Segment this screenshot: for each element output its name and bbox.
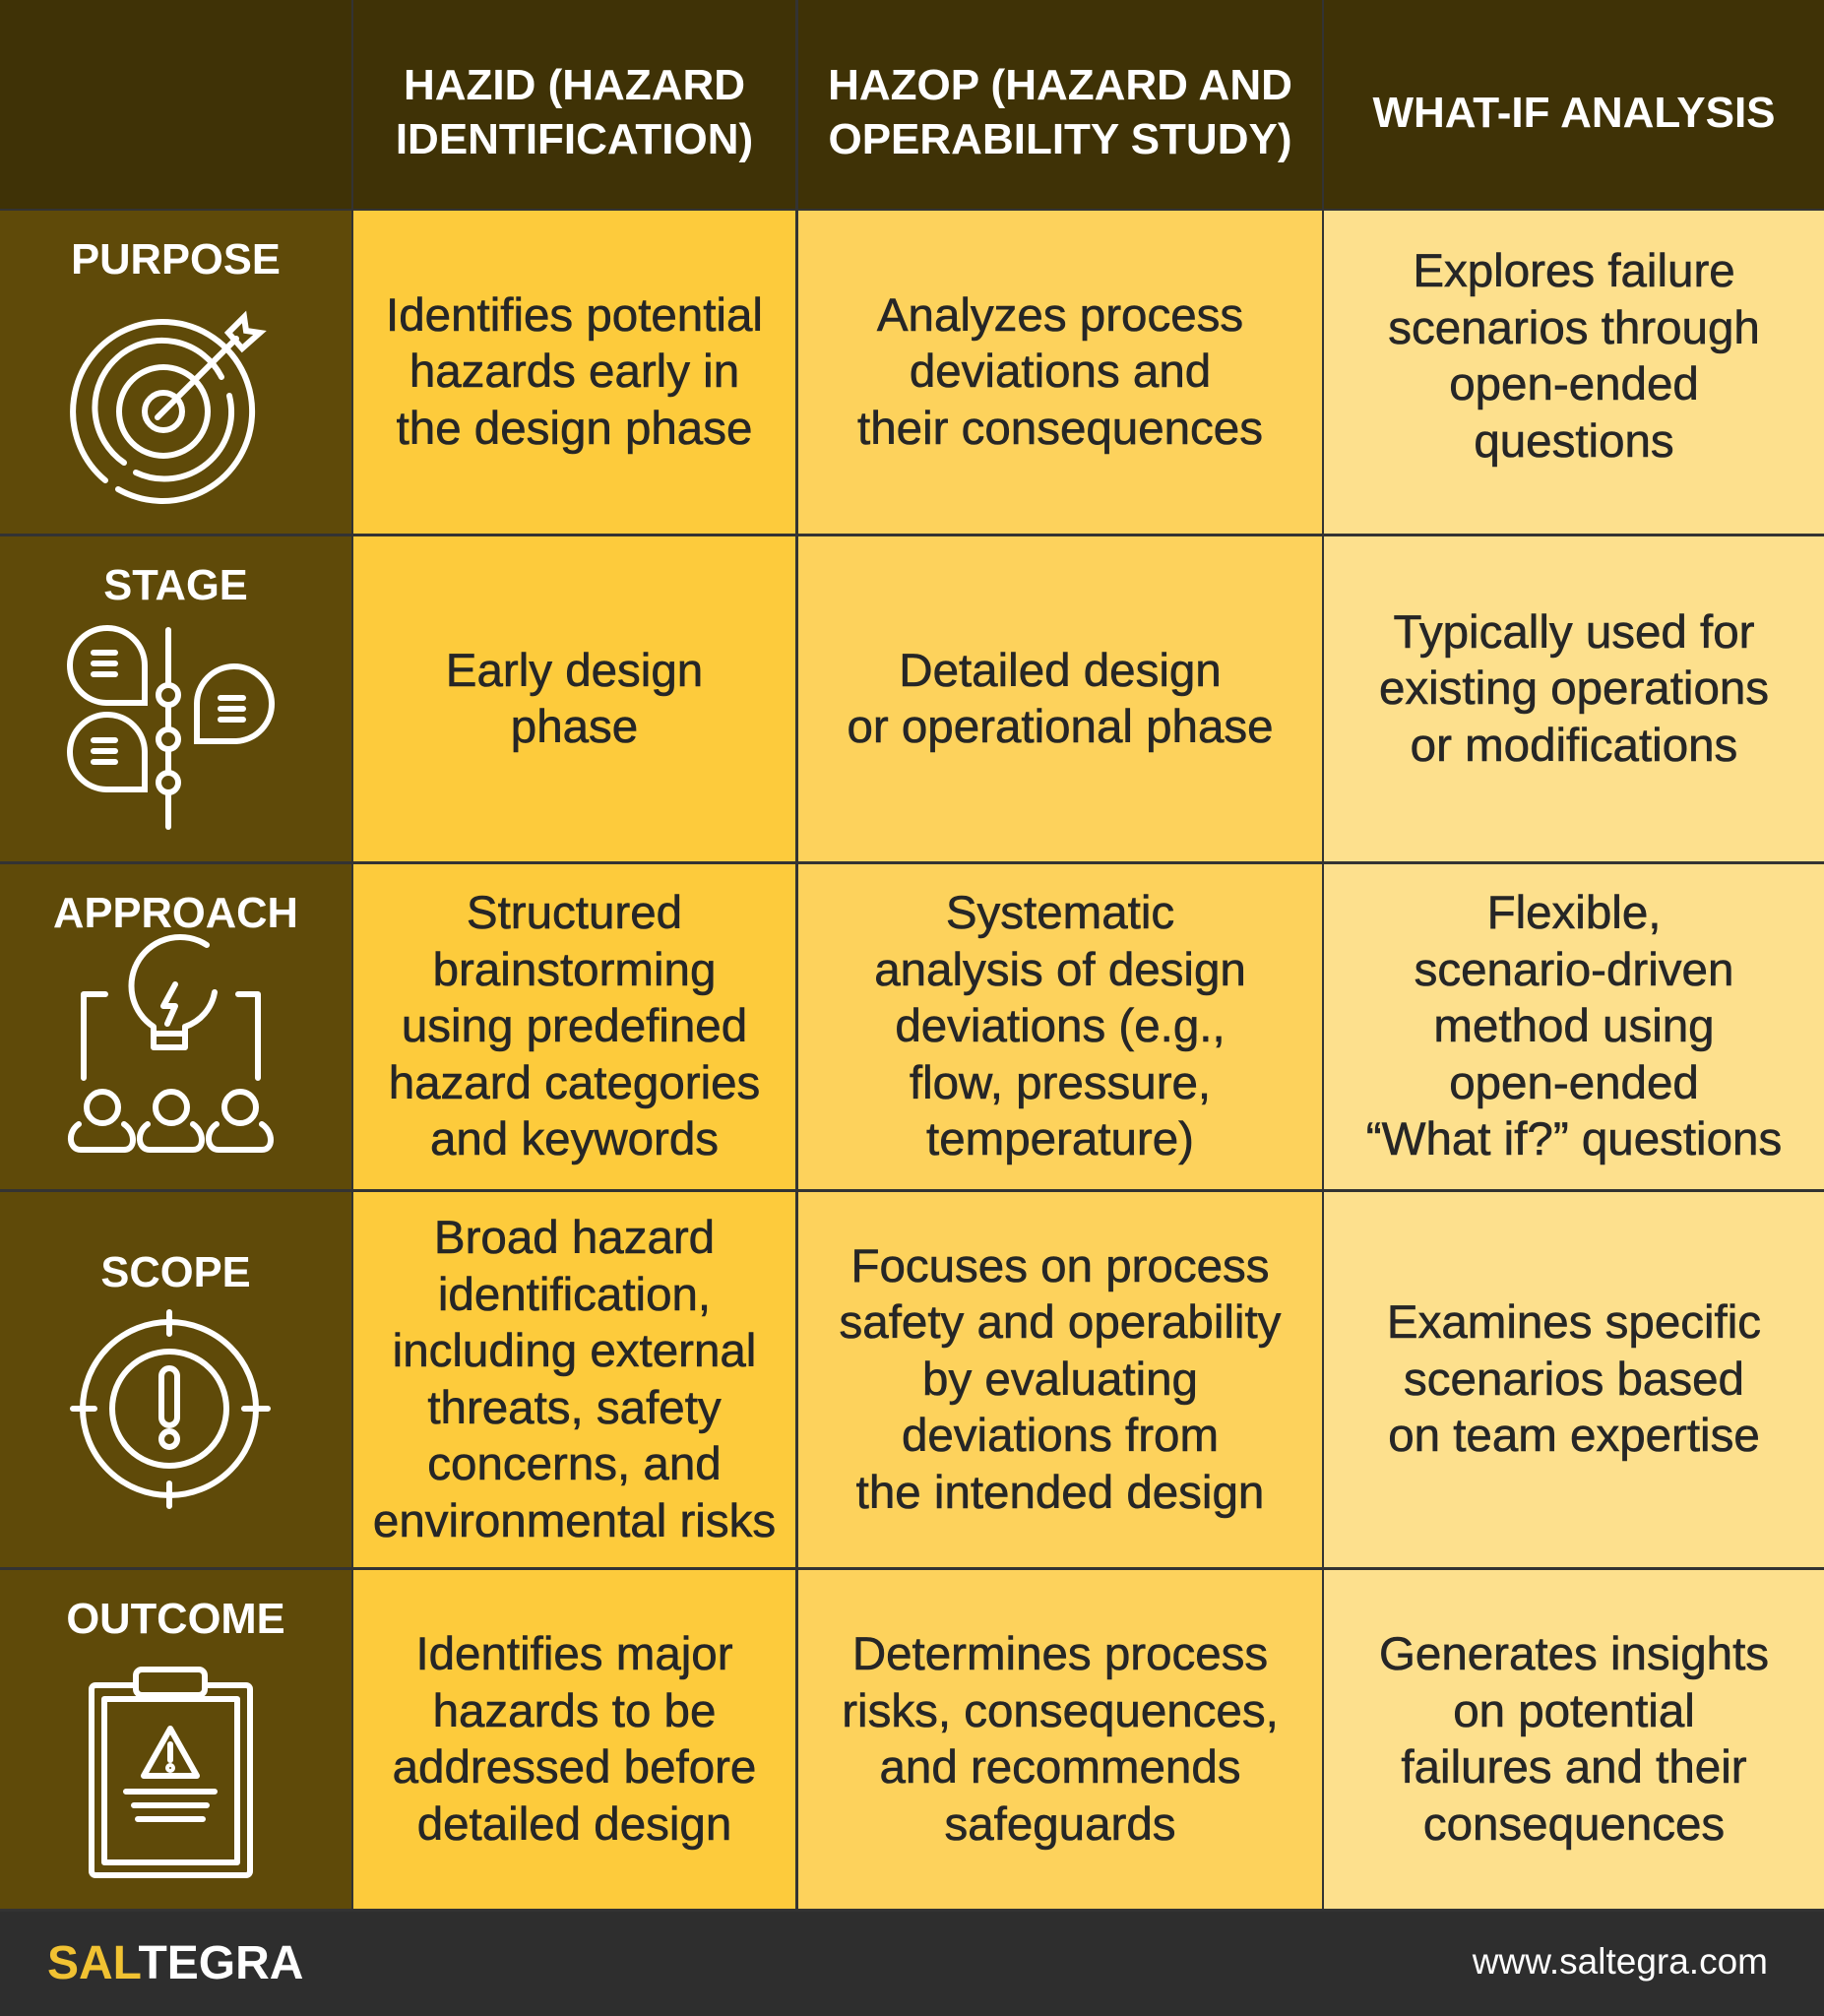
website url: www.saltegra.com: [1473, 1941, 1768, 1982]
cell: approach whatif: method using: [1433, 1000, 1715, 1052]
cell: purpose whatif: open-ended: [1449, 358, 1699, 410]
row label: purpose: [0, 211, 351, 534]
cell: approach whatif: “What if?” questions: [1366, 1113, 1782, 1166]
cell: stage hazop: or operational phase: [847, 701, 1274, 753]
cell: stage hazid: Early design: [446, 644, 703, 697]
cell: scope hazop: deviations from: [902, 1410, 1219, 1462]
cell: stage hazid: [353, 536, 795, 861]
row label: scope: [0, 1192, 351, 1567]
cell: outcome hazop: safeguards: [944, 1797, 1176, 1851]
cell: purpose hazid: [353, 211, 795, 534]
cell: approach hazid: using predefined: [402, 1000, 747, 1052]
cell: scope whatif: [1324, 1192, 1824, 1567]
cell: scope hazid: threats, safety: [427, 1382, 722, 1433]
cell: outcome whatif: Generates insights: [1379, 1628, 1769, 1680]
cell: outcome hazop: [798, 1570, 1322, 1909]
cell: outcome hazid: [353, 1570, 795, 1909]
cell: outcome hazop: and recommends: [880, 1741, 1240, 1794]
logo: SALTEGRA: [47, 1937, 303, 1989]
cell: purpose hazop: their consequences: [857, 403, 1263, 455]
cell: scope whatif: Examines specific: [1387, 1296, 1761, 1349]
header: What-if: WHAT-IF ANALYSIS: [1372, 89, 1776, 136]
cell: scope hazid: identification,: [438, 1268, 711, 1321]
cell: outcome hazid: addressed before: [393, 1741, 756, 1794]
cell: outcome whatif: [1324, 1570, 1824, 1909]
row label: stage: STAGE: [103, 562, 248, 609]
cell: stage whatif: existing operations: [1379, 662, 1769, 715]
cell: scope whatif: scenarios based: [1404, 1354, 1744, 1406]
header: HAZOP: OPERABILITY STUDY): [828, 115, 1291, 163]
cell: scope hazid: [353, 1192, 795, 1567]
cell: scope hazid: Broad hazard: [434, 1212, 715, 1264]
cell: purpose hazid: Identifies potential: [386, 289, 763, 342]
icon: target: [70, 311, 267, 504]
header: HAZOP: HAZOP (HAZARD AND: [828, 61, 1292, 109]
row label: scope: SCOPE: [100, 1249, 251, 1296]
cell: scope hazid: including external: [393, 1325, 756, 1377]
cell: outcome whatif: on potential: [1453, 1685, 1695, 1736]
cell: approach whatif: open-ended: [1449, 1057, 1699, 1109]
cell: stage whatif: [1324, 536, 1824, 861]
row label: outcome: OUTCOME: [66, 1596, 285, 1643]
cell: approach hazop: Systematic: [946, 887, 1174, 939]
cell: approach hazid: hazard categories: [389, 1057, 760, 1109]
cell: purpose whatif: Explores failure: [1413, 245, 1735, 297]
header: HAZID: IDENTIFICATION): [396, 115, 753, 163]
header: HAZOP: [798, 0, 1322, 209]
row label: stage: [0, 536, 351, 861]
cell: approach hazid: [353, 864, 795, 1189]
icon: lightbulb team: [67, 934, 274, 1153]
row label: approach: APPROACH: [53, 890, 298, 937]
cell: purpose hazop: [798, 211, 1322, 534]
cell: outcome hazop: risks, consequences,: [842, 1685, 1279, 1736]
cell: scope hazid: concerns, and: [427, 1438, 722, 1490]
cell: scope hazop: safety and operability: [840, 1296, 1281, 1349]
row label: approach: [0, 864, 351, 1189]
cell: stage whatif: or modifications: [1411, 720, 1737, 772]
row label: purpose: PURPOSE: [71, 236, 281, 284]
cell: outcome whatif: failures and their: [1401, 1741, 1747, 1794]
cell: approach hazop: analysis of design: [874, 944, 1246, 996]
footer: [0, 1912, 1824, 2016]
cell: approach whatif: [1324, 864, 1824, 1189]
cell: stage hazop: Detailed design: [899, 644, 1222, 697]
cell: scope hazop: Focuses on process: [850, 1240, 1270, 1292]
cell: purpose hazop: deviations and: [910, 346, 1211, 398]
cell: approach hazop: temperature): [926, 1113, 1194, 1166]
cell: purpose whatif: [1324, 211, 1824, 534]
cell: purpose whatif: questions: [1474, 415, 1674, 467]
cell: purpose hazid: the design phase: [397, 403, 752, 455]
header row: [0, 0, 1824, 209]
cell: approach hazid: Structured: [467, 887, 682, 939]
cell: scope whatif: on team expertise: [1388, 1410, 1760, 1462]
cell: scope hazop: [798, 1192, 1322, 1567]
cell: stage whatif: Typically used for: [1394, 606, 1754, 659]
cell: outcome hazid: Identifies major: [415, 1628, 733, 1680]
cell: scope hazid: environmental risks: [373, 1494, 776, 1547]
cell: outcome hazid: detailed design: [417, 1797, 731, 1851]
cell: approach hazid: and keywords: [430, 1113, 719, 1166]
cell: approach hazid: brainstorming: [433, 944, 716, 996]
cell: approach hazop: flow, pressure,: [910, 1057, 1211, 1109]
cell: approach whatif: scenario-driven: [1415, 944, 1733, 996]
cell: scope hazop: by evaluating: [922, 1354, 1198, 1406]
cell: stage hazop: [798, 536, 1322, 861]
header: HAZID: [353, 0, 795, 209]
cell: approach hazop: [798, 864, 1322, 1189]
cell: outcome hazid: hazards to be: [433, 1685, 716, 1736]
header: HAZID: HAZID (HAZARD: [404, 61, 745, 109]
cell: scope hazop: the intended design: [856, 1467, 1264, 1519]
cell: approach hazop: deviations (e.g.,: [895, 1000, 1226, 1052]
header: What-if: [1324, 0, 1824, 209]
cell: purpose whatif: scenarios through: [1388, 301, 1760, 354]
icon: clipboard warning: [89, 1667, 253, 1878]
icon: alert crosshair: [70, 1309, 271, 1509]
cell: purpose hazid: hazards early in: [409, 346, 739, 398]
cell: approach whatif: Flexible,: [1487, 887, 1661, 939]
icon: timeline bubbles: [67, 625, 275, 830]
cell: stage hazid: phase: [511, 701, 638, 753]
row label: outcome: [0, 1570, 351, 1909]
cell: outcome whatif: consequences: [1423, 1797, 1725, 1851]
cell: purpose hazop: Analyzes process: [877, 289, 1243, 342]
cell: outcome hazop: Determines process: [852, 1628, 1268, 1680]
